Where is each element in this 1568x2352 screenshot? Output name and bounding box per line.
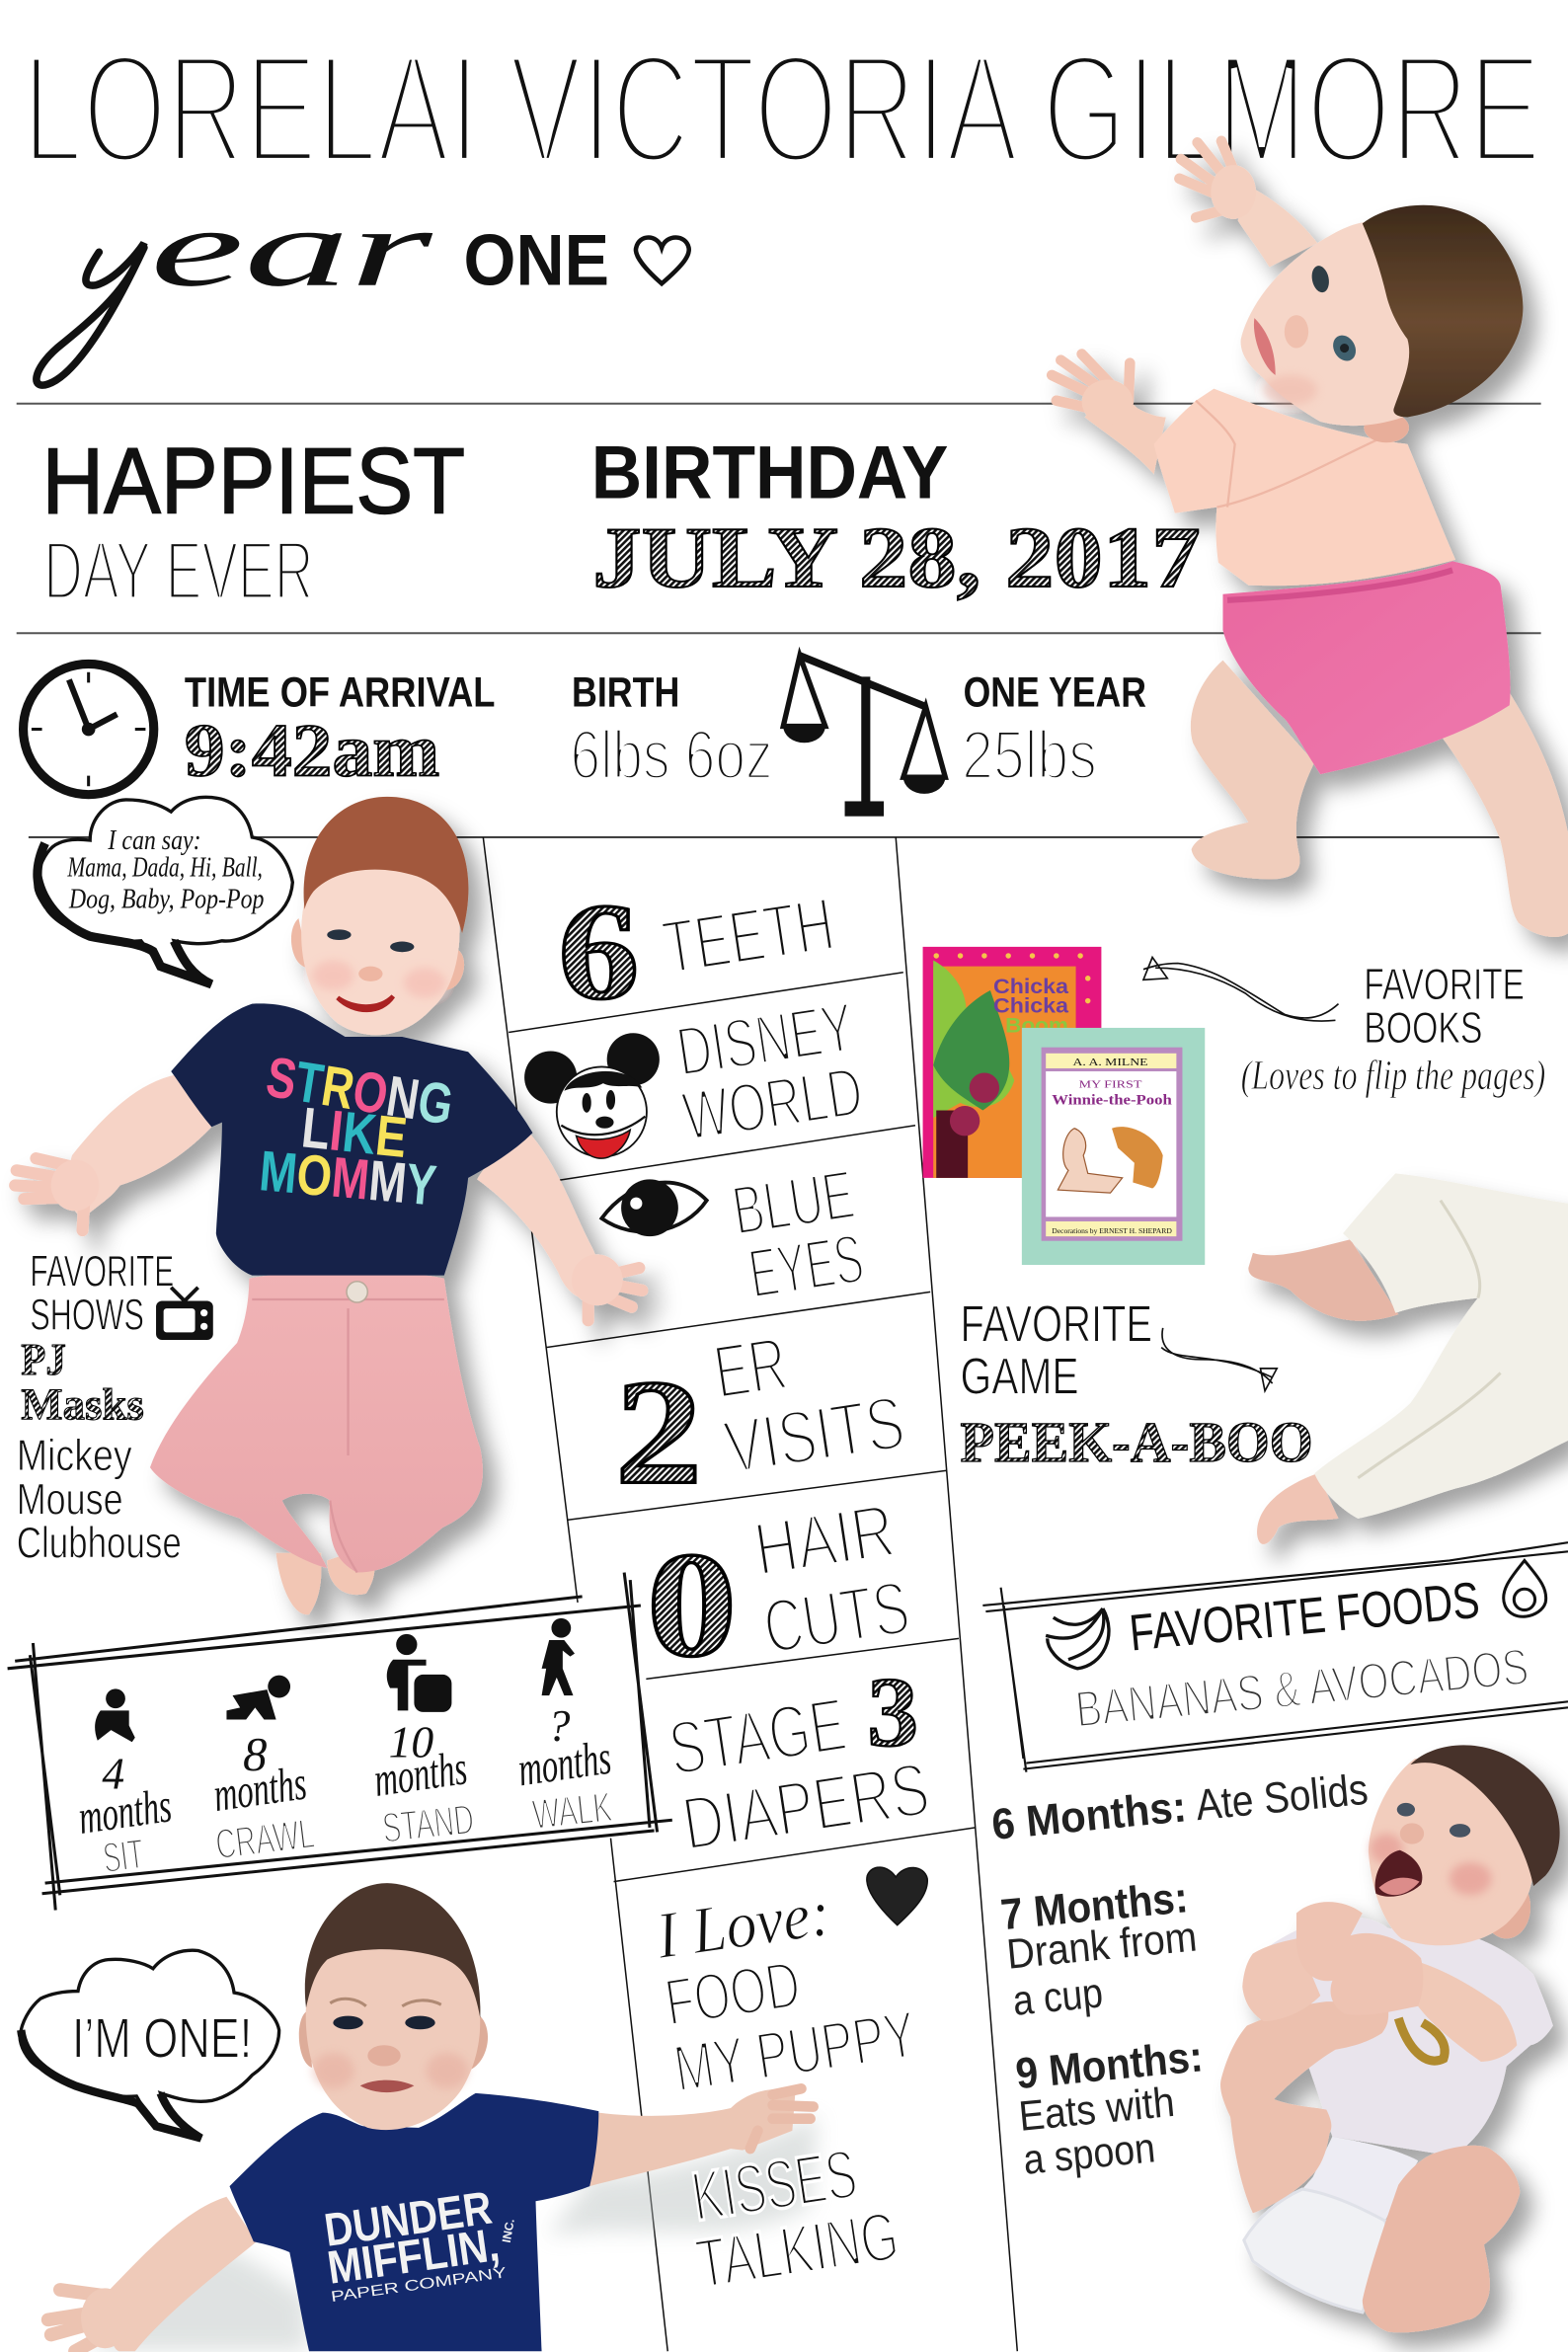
soft shadow [90, 2116, 818, 2351]
book: chicka chicka boom boom: Chicka [993, 975, 1068, 998]
book: chicka chicka boom boom: Boom [1005, 1013, 1068, 1037]
list items overlapping shadow: KISSES [687, 2135, 862, 2235]
row: stage 3 diapers: DIAPERS [677, 1747, 934, 1867]
text: food milestones: Eats with [1017, 2078, 1177, 2141]
shirt print [257, 1046, 457, 1218]
text: birth weight: BIRTH [572, 669, 679, 717]
text: favorite shows: PJ [21, 1334, 66, 1384]
gold print [1398, 2018, 1445, 2061]
row: 6 teeth: 6 [558, 876, 639, 1029]
feet [276, 1545, 375, 1614]
hair [1363, 205, 1523, 417]
row: 2 er visits: VISITS [719, 1380, 909, 1490]
shirt print [321, 2181, 517, 2306]
text: favorite shows: Mickey [17, 1432, 132, 1480]
text: favorite shows [17, 1247, 182, 1567]
text: favorite shows: SHOWS [30, 1291, 144, 1339]
left leg and foot [1191, 661, 1314, 879]
row: stage 3 diapers [664, 1657, 934, 1867]
shirt print: LIKE [299, 1096, 410, 1170]
speech bubble: i'm one: I’M ONE! [72, 2006, 252, 2069]
text: food milestones: a spoon [1021, 2124, 1157, 2184]
text: favorite game: PEEK-A-BOO [961, 1412, 1313, 1474]
row: i love list: MY PUPPY [669, 1998, 921, 2106]
milestone: crawl [210, 1676, 317, 1869]
panel: favorite foods: FAVORITE FOODS [1127, 1571, 1482, 1662]
text: favorite game: FAVORITE [961, 1295, 1152, 1353]
text: happiest day ever: HAPPIEST [42, 430, 465, 533]
milestone: sit [75, 1688, 175, 1882]
icon: avocado [1504, 1560, 1546, 1616]
hair [305, 1883, 480, 2018]
row: 2 er visits: ER [709, 1321, 793, 1415]
text: favorite shows: Masks [21, 1379, 144, 1430]
ears [299, 2010, 488, 2071]
text: favorite shows: Mouse [17, 1475, 123, 1524]
photo: baby climbing in pink shorts [1052, 141, 1568, 937]
heading: year one: ONE [464, 221, 609, 301]
bodysuit lower [1302, 2137, 1418, 2221]
hair [1410, 1745, 1560, 1886]
text: time of arrival: TIME OF ARRIVAL [185, 669, 495, 717]
lower arm and hand [1052, 354, 1166, 474]
diaper cover [1244, 2189, 1389, 2313]
row: 0 hair cuts: HAIR [749, 1488, 900, 1592]
icon: scribbled heart [867, 1867, 927, 1925]
left arm and hand [48, 2197, 257, 2351]
near leg and foot [1363, 2146, 1520, 2332]
speech bubble: i can say: I can say: [108, 824, 201, 856]
panel: milestones frame [8, 1573, 672, 1910]
right arm and hand [477, 1129, 642, 1320]
upper arm and hand [1179, 141, 1317, 267]
milestone: stand: STAND [380, 1796, 476, 1852]
milestone: crawl: 8 [243, 1728, 267, 1781]
shirt print: MIFFLIN, [324, 2218, 503, 2294]
book: my first winnie-the-pooh: A. A. MILNE [1073, 1058, 1148, 1068]
text: favorite books: BOOKS [1364, 1004, 1482, 1053]
text: happiest day ever: DAY EVER [43, 523, 314, 616]
row: blue eyes [728, 1155, 868, 1312]
row: i love list: FOOD [661, 1947, 805, 2040]
row: i love list: I Love: [652, 1876, 834, 1973]
face [301, 846, 460, 1035]
milestone: crawl: CRAWL [213, 1810, 317, 1869]
text: birthday date: JULY 28, 2017 [592, 510, 1201, 606]
book: chicka chicka boom boom [923, 947, 1101, 1178]
row: blue eyes: BLUE [728, 1155, 859, 1249]
milestone: sit: months [75, 1778, 175, 1844]
text: one year weight: 25lbs [962, 717, 1097, 794]
text: food milestones [989, 1765, 1371, 2184]
list items overlapping shadow [687, 2135, 903, 2303]
ear [1364, 413, 1409, 442]
ears [291, 918, 464, 990]
shirt [171, 1003, 532, 1276]
photo: baby legs in white pants [1248, 1173, 1568, 1544]
icon: scale [783, 656, 945, 817]
icon: television [156, 1288, 213, 1340]
row: 0 hair cuts [647, 1488, 914, 1687]
text: food milestones: Ate Solids [1194, 1765, 1371, 1830]
shirt print: STRONG [262, 1046, 457, 1137]
heading: year one: ear [150, 188, 434, 310]
shorts [1222, 561, 1511, 774]
speech bubble: i can say [36, 797, 292, 984]
photo: baby in strong like mommy shirt [15, 797, 642, 1614]
text: one year weight [962, 669, 1146, 794]
milestone: walk: months [514, 1731, 614, 1796]
book: chicka chicka boom boom: Chicka [993, 994, 1068, 1018]
book: my first winnie-the-pooh: MY FIRST [1079, 1080, 1142, 1091]
face [1241, 222, 1432, 426]
milestone: stand [370, 1634, 476, 1852]
speech bubble: i'm one [20, 1950, 279, 2138]
text: birth weight: 6lbs 6oz [570, 717, 773, 794]
text: food milestones: a cup [1011, 1969, 1105, 2025]
photo: baby in dunder mifflin shirt [48, 1883, 818, 2351]
photo: baby holding foot [1220, 1745, 1560, 2332]
thigh and shin [1220, 2001, 1388, 2213]
text: happiest day ever [42, 430, 465, 616]
right arm [1418, 1963, 1517, 2062]
milestone: walk [514, 1618, 614, 1839]
icon: mickey mouse [524, 1033, 660, 1158]
row: 6 teeth [558, 876, 839, 1029]
row: stage 3 diapers: 3 [867, 1657, 918, 1766]
heading: year one [37, 188, 689, 385]
shirt print: MOMMY [257, 1139, 438, 1218]
speech bubble: i can say: Dog, Baby, Pop-Pop [68, 883, 264, 914]
row: i love list [652, 1876, 921, 2106]
speech bubble: i can say: Mama, Dada, Hi, Ball, [67, 851, 263, 883]
text: food milestones: Drank from [1005, 1913, 1199, 1979]
text: birthday date [591, 431, 1201, 606]
face [1369, 1759, 1533, 1945]
milestone: stand: 10 [389, 1716, 433, 1766]
row: 0 hair cuts: CUTS [758, 1566, 914, 1670]
text: favorite shows: FAVORITE [30, 1247, 174, 1295]
text: food milestones: 7 Months: [998, 1873, 1190, 1939]
text: food milestones: 9 Months: [1014, 2032, 1205, 2098]
milestone: crawl: months [210, 1756, 310, 1822]
hair [304, 797, 468, 933]
shirt [1154, 389, 1455, 586]
row: stage 3 diapers: STAGE [664, 1683, 851, 1792]
row: disney world: DISNEY [672, 988, 858, 1090]
bodysuit [1270, 1918, 1553, 2154]
text: favorite game: GAME [961, 1348, 1079, 1405]
row: 6 teeth: TEETH [658, 882, 839, 990]
icon: bananas [1046, 1608, 1109, 1669]
book: my first winnie-the-pooh: Decorations by ERNEST H. SHEPARD [1052, 1226, 1172, 1235]
left arm [1242, 1938, 1320, 2021]
right leg and foot [1441, 690, 1568, 937]
book: my first winnie-the-pooh: Winnie-the-Pooh [1052, 1091, 1172, 1108]
right arm and hand [589, 2088, 814, 2186]
panel: favorite foods [982, 1542, 1568, 1772]
milestone: walk: ? [548, 1700, 571, 1751]
text: birthday date: BIRTHDAY [591, 431, 948, 515]
text: food milestones: 6 Months: [989, 1782, 1189, 1849]
hands [1296, 1902, 1423, 2015]
left arm and hand [15, 1074, 213, 1230]
text: birth weight [570, 669, 773, 794]
pants [150, 1272, 483, 1573]
shirt print: DUNDER [321, 2181, 495, 2256]
face [306, 1930, 480, 2130]
list items overlapping shadow: TALKING [691, 2197, 903, 2303]
text: one year weight: ONE YEAR [964, 669, 1146, 717]
icon: eye [601, 1179, 707, 1236]
text: time of arrival: 9:42am [185, 710, 439, 793]
shirt print: PAPER COMPANY [330, 2264, 508, 2306]
row: 0 hair cuts: 0 [647, 1522, 737, 1687]
milestone: stand: months [370, 1741, 470, 1807]
book: my first winnie-the-pooh [1022, 1028, 1205, 1265]
row: disney world: WORLD [678, 1053, 868, 1155]
row: blue eyes: EYES [745, 1219, 868, 1312]
arrow: to books [1143, 958, 1338, 1021]
milestone: sit: SIT [101, 1831, 146, 1882]
milestone: walk: WALK [530, 1783, 614, 1839]
arrow: to game [1161, 1328, 1277, 1391]
shirt print: INC. [500, 2218, 517, 2243]
row: 2 er visits [615, 1321, 909, 1515]
icon: clock [24, 664, 154, 795]
text: favorite shows: Clubhouse [17, 1519, 182, 1567]
text: favorite books [1241, 961, 1545, 1099]
row: 2 er visits: 2 [615, 1349, 702, 1515]
milestone: sit: 4 [102, 1748, 124, 1798]
text: time of arrival [185, 669, 495, 793]
ear [1482, 1876, 1530, 1938]
shirt [230, 2093, 598, 2351]
row: disney world [672, 988, 868, 1155]
text: favorite game [961, 1295, 1313, 1474]
